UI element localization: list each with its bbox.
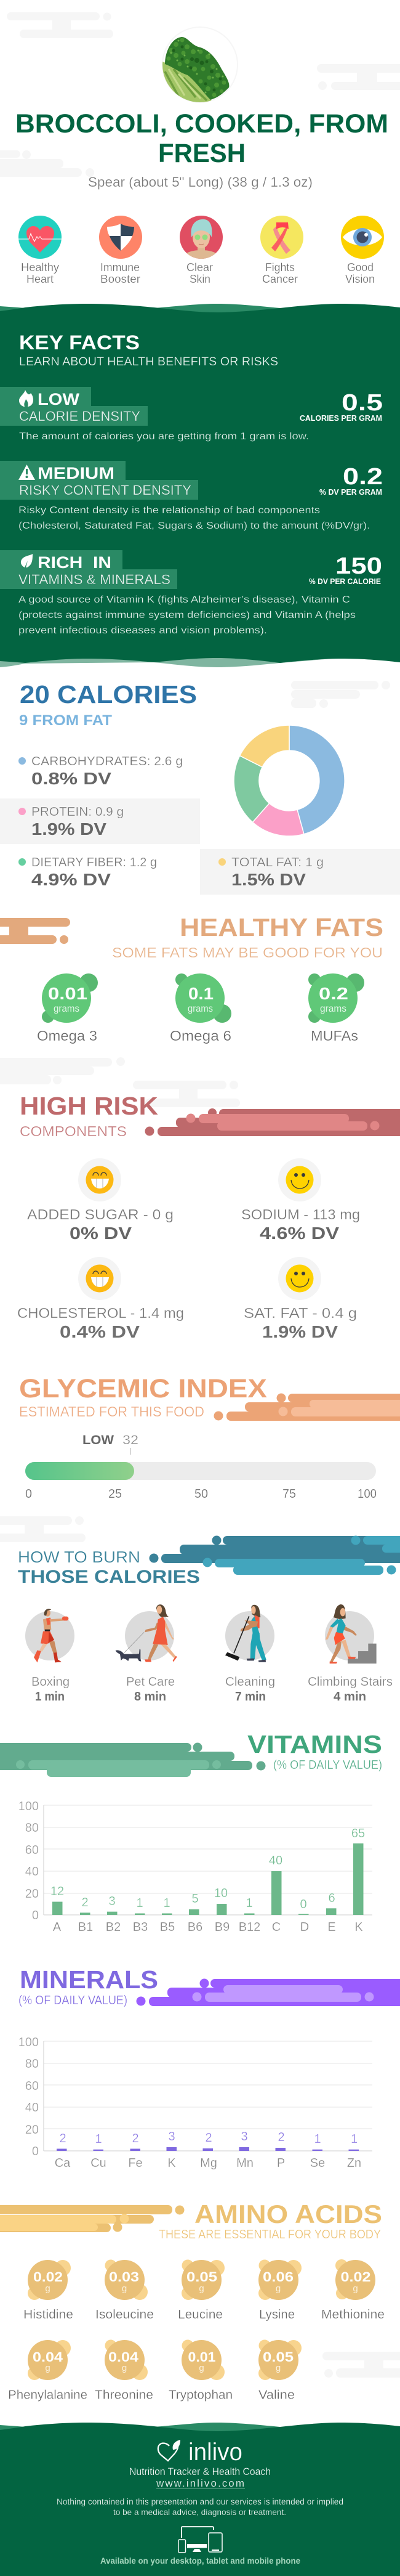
icon labels: Vision — [345, 273, 375, 285]
activity labels: Cleaning — [225, 1675, 275, 1689]
stat: cholesterol — [17, 1257, 184, 1341]
bar chart: minerals: 0 — [32, 2145, 39, 2158]
activity: pet care — [116, 1604, 177, 1662]
panel: medium risky content density: (Cholesterol, Saturated Fat, Sugars & Sodium) to the amount (%DV/gr). — [18, 521, 370, 531]
bar chart: vitamins: C — [272, 1920, 281, 1934]
subtitle: serving size: Spear (about 5" Long) (38 g / 1.3 oz) — [88, 174, 313, 190]
activity labels: 1 min — [35, 1690, 65, 1704]
icon: healthy heart — [18, 216, 62, 259]
stat: added sugar: ADDED SUGAR - 0 g — [27, 1206, 174, 1222]
stat: cholesterol: CHOLESTEROL - 1.4 mg — [17, 1305, 184, 1321]
heading: 20 calories: 9 FROM FAT — [19, 712, 112, 729]
icon: good vision eye — [341, 216, 384, 259]
bar chart: vitamins: 2 — [81, 1896, 89, 1909]
gauge: glycemic index bar: 32 — [122, 1433, 138, 1447]
amino: isoleucine: Isoleucine — [95, 2308, 154, 2322]
stat: sodium: 4.6% DV — [260, 1224, 339, 1243]
bar chart: minerals: Mg — [200, 2156, 217, 2170]
amino: histidine: g — [45, 2283, 50, 2294]
icon labels: Cancer — [262, 273, 298, 285]
heading: how to burn those calories: THOSE CALORIES — [18, 1567, 200, 1587]
stat: sodium: SODIUM - 113 mg — [241, 1206, 360, 1222]
stat: saturated fat — [244, 1257, 357, 1341]
legend: protein: PROTEIN: 0.9 g — [31, 805, 124, 819]
bar chart: minerals: 40 — [25, 2101, 39, 2115]
bar chart: vitamins: 0 — [300, 1898, 307, 1911]
activity labels: Boxing — [31, 1675, 70, 1689]
gauge: glycemic index bar: 75 — [282, 1487, 296, 1501]
stat: mufas: grams — [320, 1004, 346, 1014]
icon labels: Heart — [26, 273, 54, 285]
amino: tryptophan: g — [199, 2363, 204, 2373]
amino: leucine: 0.05 — [186, 2269, 217, 2285]
amino: tryptophan: Tryptophan — [169, 2388, 233, 2402]
bar chart: vitamins: D — [300, 1920, 309, 1934]
bar chart: minerals: 3 — [168, 2130, 175, 2143]
bar chart: vitamins: 0 — [32, 1909, 39, 1922]
stat: sodium — [241, 1158, 360, 1243]
icon labels — [21, 261, 375, 285]
panel: rich in vitamins and minerals: % DV PER CALORIE — [309, 577, 381, 586]
heading: how to burn those calories: HOW TO BURN — [18, 1548, 140, 1566]
amino: tryptophan — [169, 2340, 233, 2402]
activity: climbing stairs — [325, 1604, 377, 1664]
activity labels: 4 min — [334, 1690, 366, 1704]
activity labels: 8 min — [134, 1690, 166, 1704]
heading: glycemic index: GLYCEMIC INDEX — [19, 1374, 267, 1404]
heading: amino acids — [159, 2200, 382, 2241]
stat: mufas — [308, 973, 364, 1044]
amino: threonine: g — [122, 2363, 127, 2373]
heading: key facts: KEY FACTS — [19, 331, 140, 354]
amino: tryptophan: 0.01 — [188, 2349, 215, 2365]
bar chart: minerals: K — [167, 2156, 176, 2170]
logo wordmark: inlivo — [188, 2439, 242, 2466]
activity: boxing — [25, 1609, 74, 1662]
panel: footer: Nutrition Tracker & Health Coach — [129, 2466, 271, 2477]
panel: rich in vitamins and minerals: prevent infectious diseases and vision problems). — [18, 625, 267, 636]
icon: flame — [19, 390, 33, 407]
panel: medium risky content density: RISKY CONTENT DENSITY — [19, 482, 191, 498]
amino: lysine — [258, 2260, 302, 2322]
panel: medium risky content density: % DV PER GRAM — [319, 488, 382, 497]
amino: phenylalanine: g — [45, 2363, 50, 2373]
bar chart: minerals — [18, 2036, 372, 2170]
gauge: glycemic index bar: 100 — [358, 1487, 377, 1501]
bar chart: minerals: Fe — [128, 2156, 143, 2170]
icon labels: Immune — [100, 261, 140, 274]
heading: healthy fats: HEALTHY FATS — [180, 913, 383, 941]
stat: omega 6 — [170, 973, 231, 1044]
bar chart: vitamins: 40 — [25, 1865, 39, 1879]
panel: low calorie density: LOW — [38, 390, 80, 408]
amino: threonine: Threonine — [95, 2388, 153, 2402]
bar chart: minerals: 60 — [25, 2079, 39, 2093]
icon: inlivo heart logo — [158, 2440, 180, 2461]
amino: phenylalanine — [8, 2340, 87, 2402]
panel: medium risky content density: Risky Content density is the relationship of bad components — [18, 505, 320, 516]
bar chart: minerals: 1 — [95, 2132, 102, 2146]
title: FRESH — [158, 139, 246, 168]
icon: devices — [178, 2527, 222, 2553]
bar chart: vitamins: B9 — [215, 1920, 230, 1934]
gauge: glycemic index bar: 50 — [194, 1487, 208, 1501]
panel: low calorie density: 0.5 — [342, 390, 383, 416]
legend: dietary fiber: DIETARY FIBER: 1.2 g — [31, 856, 157, 869]
icon labels: Good — [347, 261, 374, 274]
amino: methionine: g — [353, 2283, 358, 2294]
amino: methionine — [321, 2259, 385, 2322]
stat: added sugar — [27, 1158, 174, 1243]
amino: leucine — [178, 2260, 225, 2322]
gauge: glycemic index bar: LOW — [82, 1433, 114, 1447]
panel: low calorie density: The amount of calories you are getting from 1 gram is low. — [19, 431, 309, 442]
bar chart: vitamins: 40 — [269, 1854, 282, 1867]
amino: lysine: 0.06 — [263, 2269, 294, 2285]
panel: low calorie density: CALORIES PER GRAM — [300, 414, 382, 423]
bar chart: vitamins: 3 — [108, 1895, 116, 1908]
gauge: glycemic index bar: 25 — [108, 1487, 122, 1501]
bar chart: vitamins — [18, 1800, 372, 1934]
panel: footer — [0, 2423, 400, 2576]
panel: rich in vitamins and minerals: RICH IN — [38, 553, 111, 572]
icon labels: Skin — [190, 273, 210, 285]
heading: high risk components — [20, 1092, 158, 1139]
broccoli illustration — [162, 27, 238, 105]
icon labels: Booster — [100, 273, 140, 285]
amino: histidine: 0.02 — [33, 2269, 63, 2285]
bar chart: minerals: 80 — [25, 2057, 39, 2071]
panel: key facts background with waves — [0, 304, 400, 667]
amino: threonine: 0.04 — [108, 2349, 139, 2365]
panel: rich in vitamins and minerals: (protects against immune system deficiencies) and Vitamin A (helps — [18, 610, 356, 620]
bar chart: vitamins: 10 — [214, 1887, 228, 1900]
legend: total fat: 1.5% DV — [231, 870, 306, 889]
panel: low calorie density: CALORIE DENSITY — [19, 408, 140, 424]
legend: dietary fiber — [18, 856, 157, 889]
amino: leucine: g — [199, 2283, 204, 2294]
bar chart: minerals: Zn — [347, 2156, 361, 2170]
heading: healthy fats — [112, 913, 383, 961]
heading: healthy fats: SOME FATS MAY BE GOOD FOR YOU — [112, 945, 383, 961]
bar chart: vitamins: B5 — [160, 1920, 175, 1934]
stat: mufas: MUFAs — [311, 1028, 358, 1044]
amino: isoleucine: g — [122, 2283, 127, 2294]
bar chart: minerals: 3 — [241, 2130, 248, 2143]
bar chart: vitamins: 20 — [25, 1887, 39, 1901]
heading: minerals: (% OF DAILY VALUE) — [18, 1994, 127, 2007]
heading: minerals — [18, 1965, 158, 2007]
stat: omega 3: Omega 3 — [37, 1028, 97, 1044]
bar chart: vitamins: 1 — [163, 1896, 170, 1910]
bar chart: vitamins: B12 — [239, 1920, 260, 1934]
panel: rich in vitamins and minerals: A good source of Vitamin K (fights Alzheimer’s disease), Vitamin C — [18, 595, 350, 605]
panel: footer: Available on your desktop, tablet and mobile phone — [100, 2556, 300, 2566]
stat: saturated fat: 1.9% DV — [262, 1322, 338, 1341]
legend: total fat: TOTAL FAT: 1 g — [231, 856, 324, 869]
bar chart: minerals: 20 — [25, 2123, 39, 2137]
bar chart: vitamins: 5 — [191, 1892, 199, 1906]
amino: methionine: 0.02 — [341, 2269, 370, 2285]
title: BROCCOLI, COOKED, FROM — [15, 109, 388, 139]
heading: key facts: LEARN ABOUT HEALTH BENEFITS OR RISKS — [19, 356, 278, 368]
amino: phenylalanine: 0.04 — [33, 2349, 63, 2365]
icon labels: Clear — [186, 261, 213, 274]
icon: fights cancer ribbon — [260, 216, 303, 259]
bar chart: minerals: 1 — [351, 2132, 358, 2146]
activity labels: 7 min — [235, 1690, 266, 1704]
bar chart: minerals: 2 — [59, 2132, 66, 2145]
bar chart: vitamins: 12 — [50, 1885, 64, 1898]
heading: glycemic index: ESTIMATED FOR THIS FOOD — [19, 1404, 204, 1420]
heading: how to burn those calories — [18, 1548, 200, 1587]
icon: leaf — [21, 554, 33, 567]
bar chart: minerals: 2 — [205, 2131, 212, 2145]
stat: omega 6: 0.1 — [188, 984, 214, 1003]
icon: clear skin — [180, 216, 223, 259]
stat: omega 3: 0.01 — [48, 984, 87, 1003]
stat: omega 3: grams — [54, 1004, 79, 1014]
heading: high risk components: COMPONENTS — [20, 1123, 127, 1139]
bar chart: minerals: Se — [310, 2156, 325, 2170]
heading: 20 calories — [19, 680, 197, 729]
legend: protein: 1.9% DV — [31, 819, 106, 839]
icon labels: Healthy — [21, 261, 59, 274]
bar chart: vitamins: B6 — [188, 1920, 202, 1934]
amino: methionine: Methionine — [321, 2308, 385, 2322]
heading: minerals: MINERALS — [20, 1965, 158, 1994]
heading: 20 calories: 20 CALORIES — [20, 680, 197, 709]
amino: lysine: Lysine — [259, 2308, 295, 2322]
bar chart: minerals: Cu — [90, 2156, 106, 2170]
amino: isoleucine — [95, 2260, 154, 2322]
bar chart: vitamins: 1 — [246, 1896, 253, 1910]
heading: amino acids: THESE ARE ESSENTIAL FOR YOUR BODY — [159, 2228, 381, 2241]
panel: rich in vitamins and minerals — [0, 550, 382, 636]
panel: footer: to be a medical advice, diagnosis or treatment. — [113, 2508, 286, 2517]
amino: valine — [258, 2340, 302, 2402]
amino: lysine: g — [276, 2283, 281, 2294]
panel: medium risky content density: 0.2 — [343, 464, 383, 490]
heading: glycemic index — [19, 1374, 267, 1420]
stat: saturated fat: SAT. FAT - 0.4 g — [244, 1305, 357, 1321]
legend: carbohydrates: CARBOHYDRATES: 2.6 g — [31, 755, 183, 768]
legend: total fat — [200, 849, 400, 895]
donut chart — [234, 725, 345, 836]
stat: omega 6: Omega 6 — [170, 1028, 231, 1044]
bar chart: vitamins: B3 — [133, 1920, 148, 1934]
activity: cleaning — [225, 1605, 274, 1662]
bar chart: minerals: Mn — [236, 2156, 254, 2170]
icon: warning triangle — [18, 465, 35, 480]
panel: footer: Nothing contained in this presentation and our services is intended or implied — [57, 2497, 343, 2506]
panel: medium risky content density — [0, 461, 383, 531]
heading: vitamins — [247, 1730, 382, 1772]
heading: amino acids: AMINO ACIDS — [194, 2200, 382, 2229]
amino: histidine — [23, 2260, 73, 2322]
bar chart: minerals: Ca — [55, 2156, 71, 2170]
heading: vitamins: VITAMINS — [247, 1730, 382, 1758]
bar chart: vitamins: K — [354, 1920, 363, 1934]
amino: leucine: Leucine — [178, 2308, 223, 2322]
bar chart: vitamins: E — [327, 1920, 336, 1934]
heading: vitamins: (% OF DAILY VALUE) — [273, 1758, 382, 1772]
bar chart: vitamins: 65 — [351, 1827, 365, 1840]
bar chart: minerals: 100 — [18, 2036, 39, 2049]
gauge: glycemic index bar — [25, 1433, 377, 1501]
bar chart: vitamins: 100 — [18, 1800, 39, 1813]
legend: carbohydrates — [18, 755, 183, 788]
bar chart: vitamins: 6 — [328, 1891, 335, 1905]
amino: phenylalanine: Phenylalanine — [8, 2388, 87, 2402]
bar chart: vitamins: B2 — [106, 1920, 121, 1934]
amino: valine: Valine — [258, 2388, 295, 2402]
bar chart: vitamins: 1 — [136, 1896, 143, 1910]
activity labels: Climbing Stairs — [308, 1675, 393, 1689]
stat: added sugar: 0% DV — [70, 1224, 132, 1243]
bar chart: minerals: 1 — [314, 2132, 321, 2146]
legend: dietary fiber: 4.9% DV — [31, 870, 111, 889]
amino: valine: g — [276, 2363, 281, 2373]
heading: key facts — [19, 331, 278, 368]
amino: histidine: Histidine — [23, 2308, 73, 2322]
panel: rich in vitamins and minerals: VITAMINS & MINERALS — [18, 572, 170, 587]
bar chart: vitamins: A — [53, 1920, 62, 1934]
stat: cholesterol: 0.4% DV — [60, 1322, 140, 1341]
bar chart: minerals: 2 — [132, 2132, 139, 2145]
title — [15, 109, 388, 168]
activity labels — [31, 1675, 393, 1704]
stat: omega 3 — [37, 973, 98, 1044]
panel: low calorie density — [0, 387, 383, 442]
legend: protein — [0, 798, 200, 844]
gauge: glycemic index bar: 0 — [25, 1487, 32, 1501]
panel: medium risky content density: MEDIUM — [38, 464, 114, 482]
icon labels: Fights — [265, 261, 295, 274]
stat: omega 6: grams — [188, 1004, 213, 1014]
amino: valine: 0.05 — [263, 2349, 294, 2365]
legend: carbohydrates: 0.8% DV — [31, 769, 111, 788]
bar chart: minerals: P — [277, 2156, 285, 2170]
icon: immune booster shield — [99, 216, 142, 259]
bar chart: vitamins: 60 — [25, 1843, 39, 1857]
amino: threonine — [95, 2340, 153, 2402]
heading: high risk components: HIGH RISK — [20, 1092, 158, 1120]
amino: isoleucine: 0.03 — [109, 2269, 139, 2285]
bar chart: minerals: 2 — [278, 2131, 285, 2144]
panel: footer: www.inlivo.com — [156, 2477, 244, 2489]
panel: rich in vitamins and minerals: 150 — [335, 553, 382, 579]
activity labels: Pet Care — [126, 1675, 175, 1689]
bar chart: vitamins: 80 — [25, 1821, 39, 1835]
bar chart: vitamins: B1 — [78, 1920, 93, 1934]
panel: health benefit icons — [18, 216, 384, 285]
stat: mufas: 0.2 — [319, 984, 348, 1003]
